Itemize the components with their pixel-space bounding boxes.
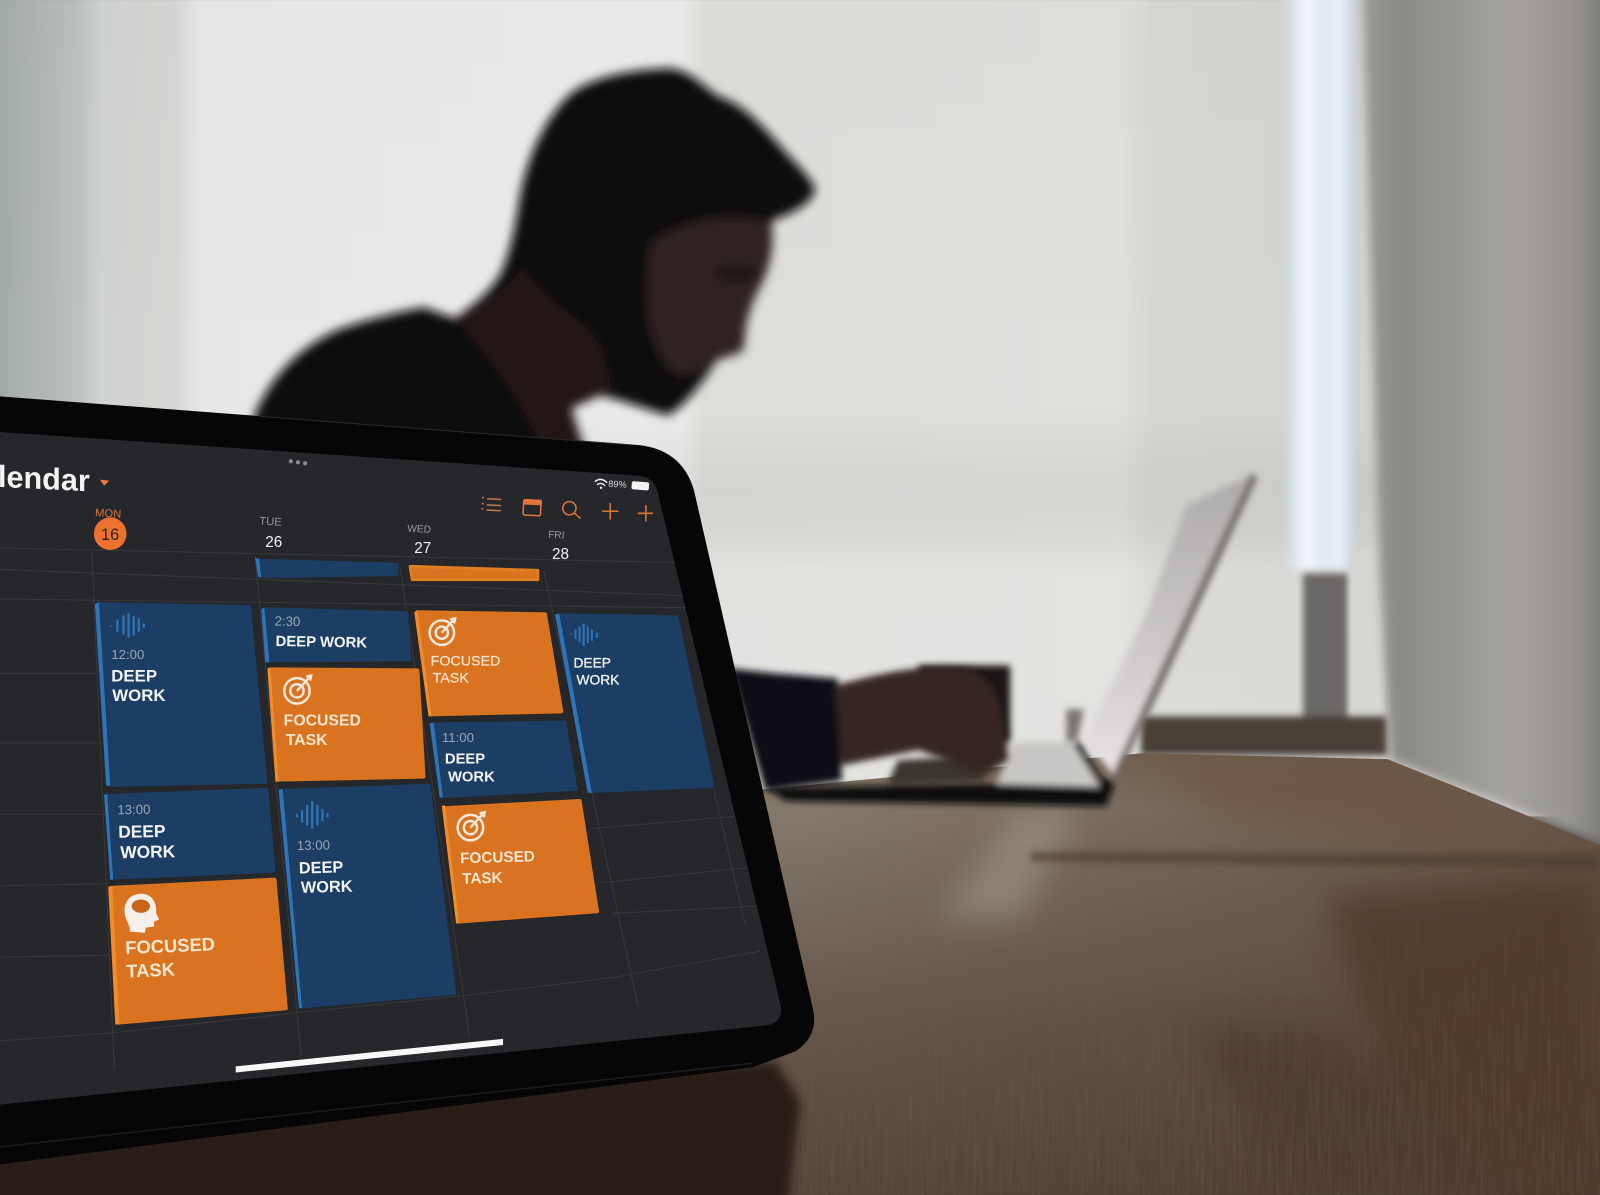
event stub: orange bbox=[410, 566, 538, 580]
day header: Tuesday: 26 bbox=[265, 534, 282, 551]
event: Friday deep work bbox=[555, 613, 712, 793]
event: Tuesday deep work 13:00: WORK bbox=[301, 878, 353, 897]
event: Wednesday focused task lower: TASK bbox=[462, 870, 503, 888]
event stub: blue bbox=[255, 558, 397, 578]
status bar: 89% bbox=[608, 479, 627, 490]
day header: Tuesday: TUE bbox=[259, 516, 282, 529]
event: Friday deep work: DEEP bbox=[573, 655, 611, 670]
day header: Friday bbox=[548, 530, 569, 563]
arm and hand bbox=[730, 667, 1008, 791]
event: Tuesday deep work 13:00: 13:00 bbox=[297, 837, 330, 853]
dropdown caret bbox=[100, 480, 109, 486]
laptop bbox=[767, 474, 1257, 806]
day header: Tuesday bbox=[259, 516, 282, 551]
icon: target bbox=[430, 618, 455, 645]
body and head outline bbox=[250, 68, 815, 454]
event: Wednesday deep work 11:00: DEEP bbox=[445, 751, 485, 767]
event: Monday deep work 13:00 bbox=[104, 790, 273, 880]
event: Wednesday focused task: TASK bbox=[433, 671, 469, 687]
table bbox=[762, 753, 1600, 1195]
tablet shadow on table bbox=[0, 1061, 801, 1195]
day header: Wednesday: 27 bbox=[414, 540, 431, 557]
status bar bbox=[595, 479, 649, 490]
home indicator bbox=[236, 1039, 503, 1072]
event: Wednesday focused task bbox=[414, 610, 561, 716]
event: Wednesday focused task: FOCUSED bbox=[431, 653, 500, 669]
calendar grid bbox=[0, 548, 760, 1069]
event: Monday deep work 13:00: DEEP bbox=[118, 821, 166, 842]
background: wall and window bbox=[0, 0, 1600, 857]
person silhouette bbox=[250, 68, 815, 454]
event: Tuesday deep work 2:30 bbox=[261, 607, 409, 662]
day header: Friday: 28 bbox=[552, 546, 569, 563]
window edge bbox=[1351, 551, 1378, 719]
neck bbox=[457, 267, 612, 447]
event: Tuesday deep work 13:00 bbox=[279, 786, 454, 1008]
event: Wednesday deep work 11:00: 11:00 bbox=[442, 730, 474, 745]
icon: waveform bbox=[111, 613, 144, 638]
event: Tuesday deep work 2:30: 2:30 bbox=[274, 614, 300, 629]
day header: Wednesday bbox=[407, 524, 431, 557]
event: Monday deep work 13:00: 13:00 bbox=[117, 802, 151, 817]
window post bbox=[1303, 574, 1348, 727]
eye shadow bbox=[714, 266, 759, 281]
keyboard bbox=[997, 742, 1100, 787]
headphones bbox=[539, 168, 641, 291]
icon: list bbox=[481, 497, 501, 511]
day header: Wednesday: WED bbox=[407, 524, 431, 536]
icon: search bbox=[563, 502, 581, 518]
icon: waveform bbox=[297, 801, 328, 829]
icon: waveform bbox=[571, 624, 597, 646]
laptop base bbox=[767, 741, 1114, 806]
event: Monday deep work 12:00: DEEP bbox=[111, 667, 157, 686]
event: Monday focused task with head: FOCUSED bbox=[125, 933, 215, 958]
face bbox=[647, 217, 773, 374]
event: Wednesday deep work 11:00: WORK bbox=[448, 770, 495, 786]
wood grain bbox=[832, 1046, 1598, 1195]
day header: Monday bbox=[94, 507, 127, 550]
tablet device bbox=[0, 396, 814, 1164]
event: Wednesday focused task lower: FOCUSED bbox=[460, 848, 535, 867]
mug behind hand bbox=[918, 665, 1010, 742]
event: Monday deep work 12:00: 12:00 bbox=[111, 647, 144, 662]
icon: add bbox=[638, 505, 653, 521]
event: Tuesday deep work 2:30: DEEP WORK bbox=[275, 634, 367, 652]
event: Tuesday deep work 13:00: DEEP bbox=[299, 858, 344, 878]
side wall bbox=[1362, 0, 1600, 857]
window light strip bbox=[1286, 0, 1355, 569]
event: Tuesday focused task: TASK bbox=[286, 732, 328, 749]
table seam bbox=[1031, 852, 1600, 867]
laptop lid bbox=[1085, 477, 1248, 776]
icon: target bbox=[458, 812, 485, 840]
window dots bbox=[289, 459, 307, 465]
icon: calendar bbox=[523, 500, 541, 516]
icon: add bbox=[602, 503, 618, 519]
day header: Monday: 16 bbox=[101, 526, 119, 544]
wood tones bbox=[944, 759, 1600, 1142]
title: Calendar: lendar bbox=[0, 460, 90, 498]
day header: Friday: FRI bbox=[548, 530, 565, 542]
event: Friday deep work: WORK bbox=[577, 673, 620, 688]
event: Tuesday focused task bbox=[267, 667, 423, 782]
event: Tuesday focused task: FOCUSED bbox=[284, 713, 361, 730]
event: Monday focused task with head bbox=[108, 880, 286, 1025]
event: Monday deep work 13:00: WORK bbox=[120, 841, 176, 862]
icon: head with brain bbox=[124, 894, 159, 933]
event: Monday deep work 12:00: WORK bbox=[112, 686, 166, 705]
tablet edge highlight bbox=[0, 1063, 752, 1147]
window sill bbox=[1141, 716, 1388, 755]
event: Wednesday focused task lower bbox=[442, 801, 597, 924]
sleeve bbox=[730, 668, 842, 791]
toolbar icons bbox=[481, 497, 653, 521]
day header: Monday: MON bbox=[95, 507, 122, 521]
tablet screen bbox=[0, 432, 781, 1105]
event: Wednesday deep work 11:00 bbox=[430, 722, 576, 798]
event: Monday deep work 12:00 bbox=[95, 602, 265, 786]
event: Monday focused task with head: TASK bbox=[126, 958, 176, 982]
icon: target bbox=[284, 676, 311, 704]
hand bbox=[835, 667, 1008, 776]
tablet body bbox=[0, 396, 814, 1164]
